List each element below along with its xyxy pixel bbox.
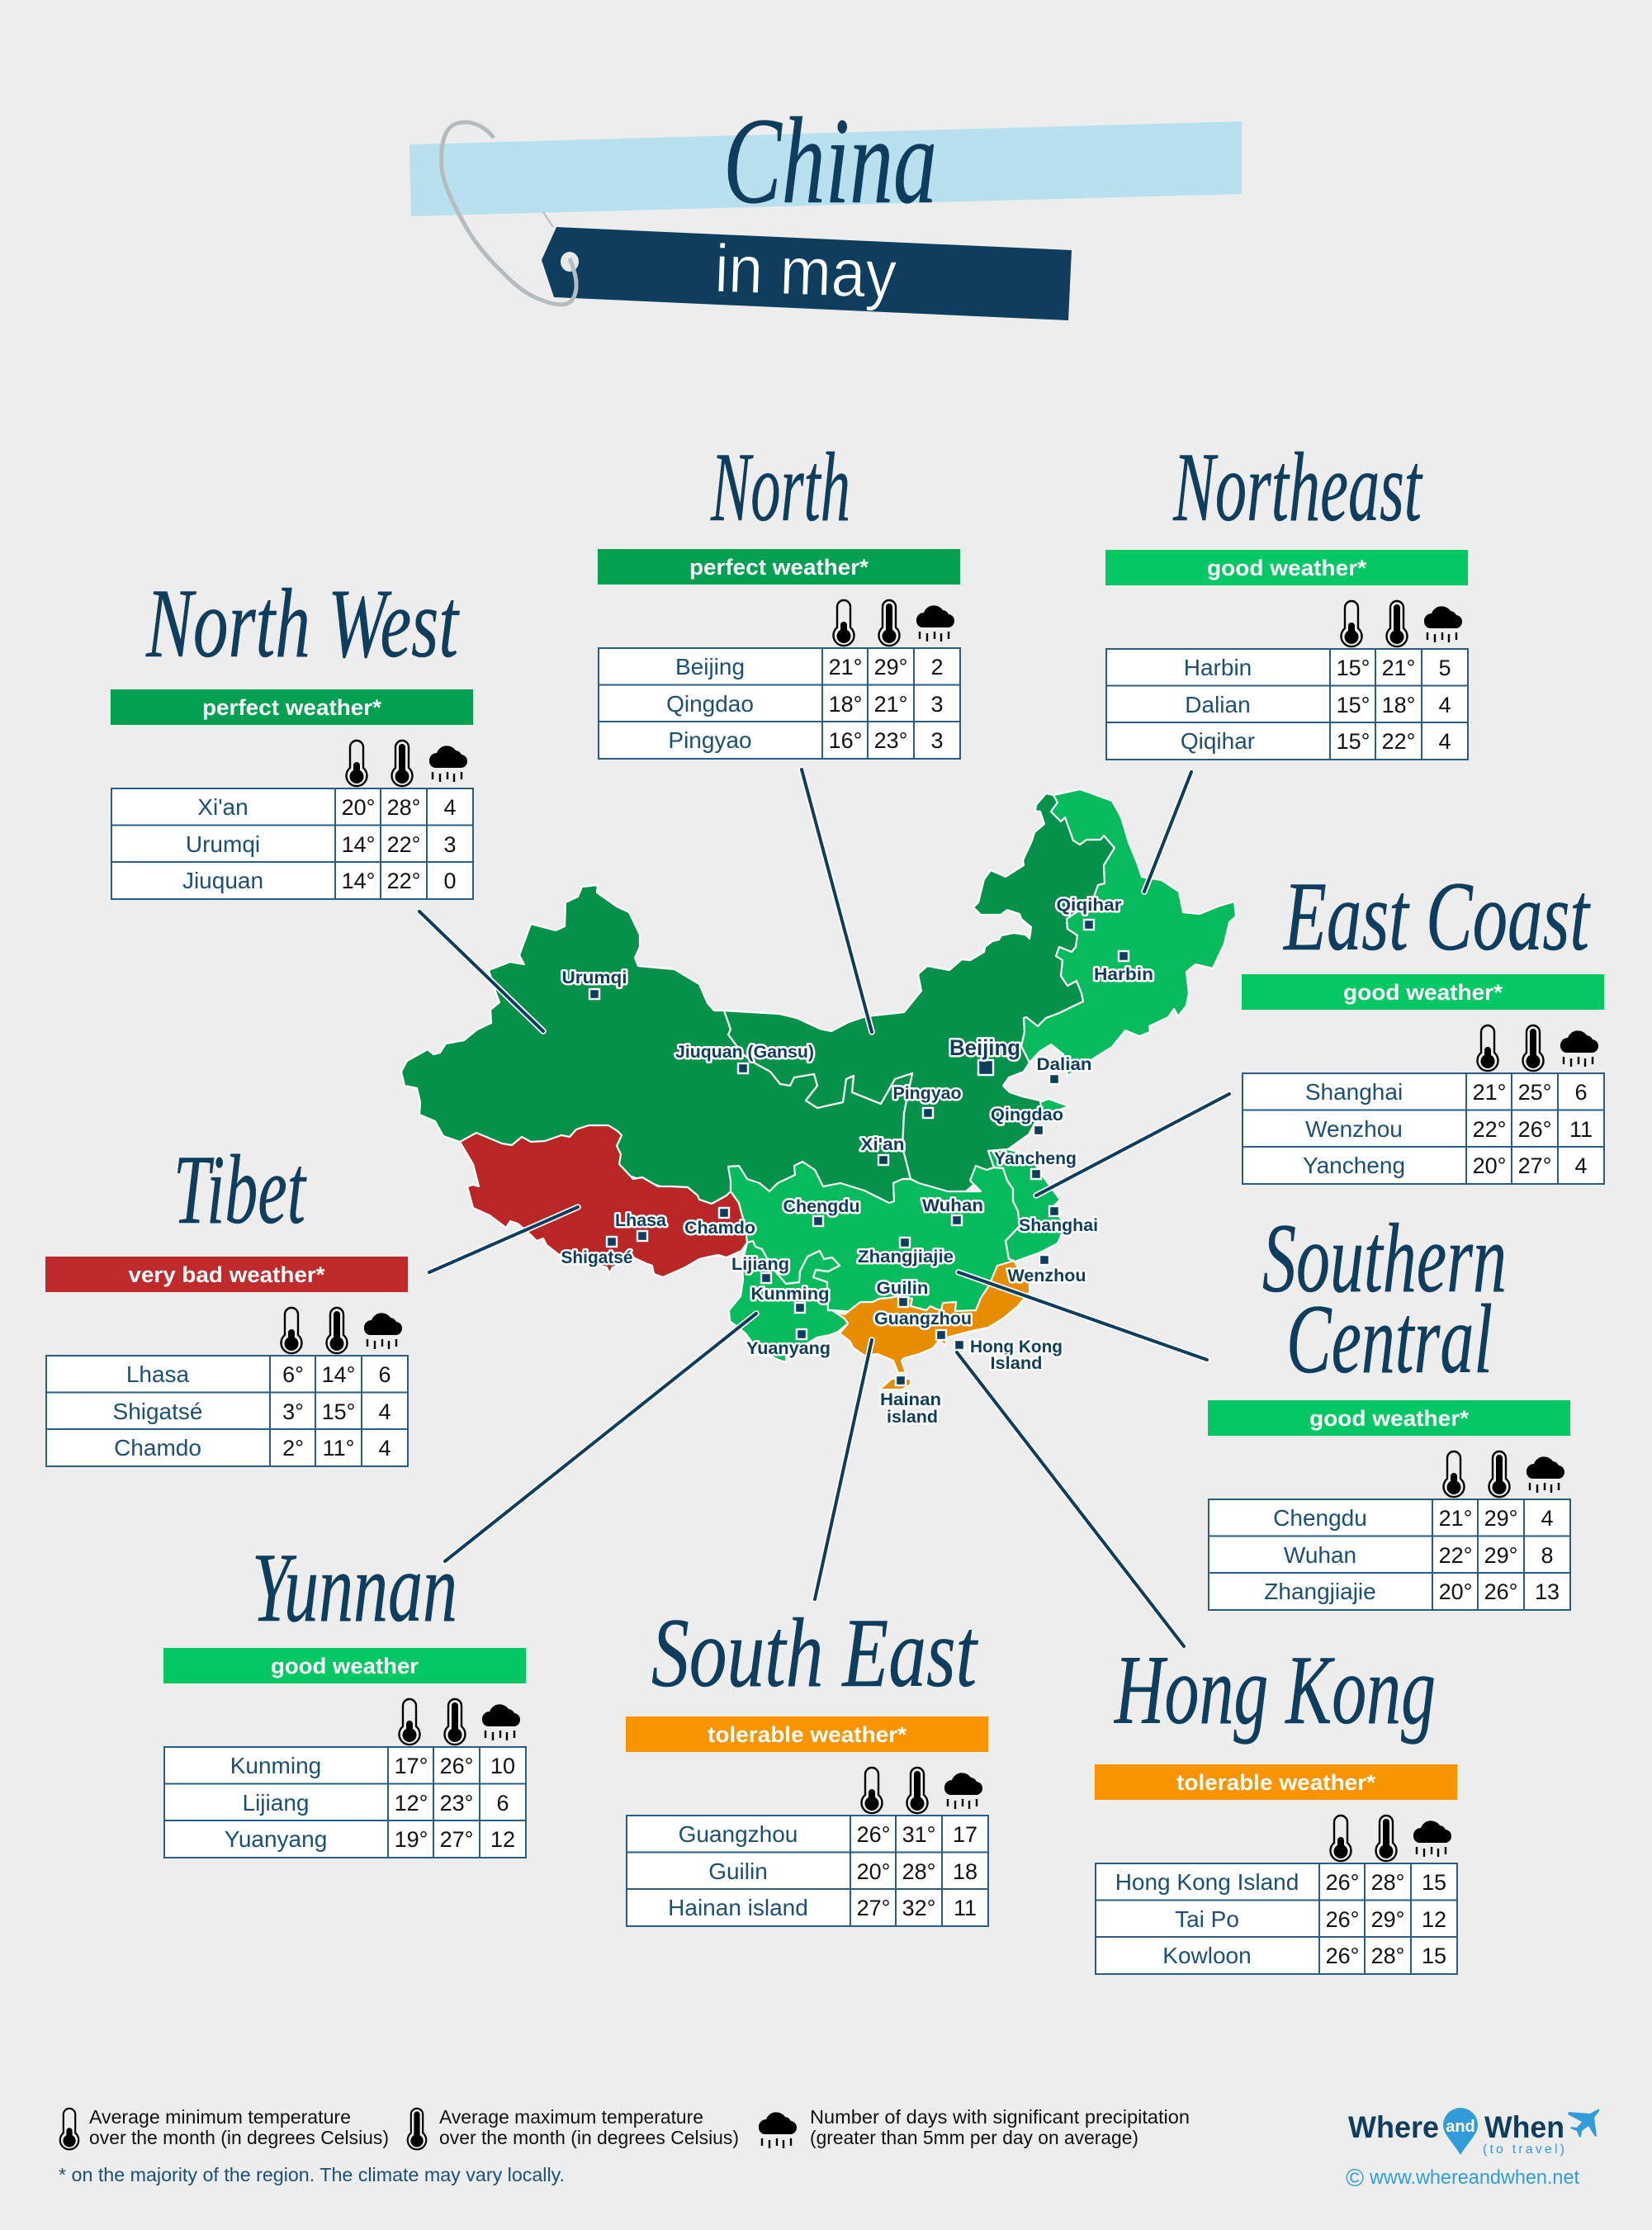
city labels: Guangzhou — [874, 1309, 972, 1328]
table: 26° — [1326, 1944, 1359, 1968]
table: Lhasa — [126, 1361, 190, 1387]
table: 29° — [1484, 1543, 1517, 1568]
table — [627, 1816, 988, 1926]
table: 21° — [829, 655, 862, 679]
logo word: Where: Where — [1348, 2110, 1439, 2144]
icons — [834, 600, 954, 646]
footnote: * on the majority of the region. The climate may vary locally. — [59, 2164, 565, 2185]
region: northeast — [1021, 789, 1236, 1076]
region: hainan island — [879, 1379, 911, 1390]
connector: yunnan — [445, 1314, 756, 1561]
table: 29° — [1371, 1907, 1404, 1932]
table: Chamdo — [114, 1435, 201, 1461]
city labels: Jiuquan (Gansu) — [675, 1043, 814, 1062]
banner: good weather* — [1207, 556, 1367, 580]
table: 4 — [1438, 693, 1451, 717]
panel: south east — [626, 1598, 988, 1926]
table: 2 — [930, 655, 944, 679]
weather table — [111, 689, 473, 899]
table: 22° — [387, 832, 420, 857]
table: 3 — [930, 692, 944, 717]
table: 15° — [322, 1399, 355, 1424]
banner: tolerable weather* — [708, 1722, 907, 1747]
table: Hainan island — [668, 1895, 808, 1920]
city labels: Harbin — [1094, 965, 1153, 984]
table: 0 — [443, 869, 457, 893]
table: 14° — [342, 832, 375, 857]
table: 11 — [1569, 1117, 1593, 1142]
table: 26° — [1484, 1579, 1517, 1604]
table: Tai Po — [1175, 1906, 1239, 1932]
heading: Northeast: Northeast — [1172, 432, 1423, 542]
banner — [598, 549, 960, 585]
table: Beijing — [675, 654, 745, 679]
heading: North West: North West — [145, 568, 460, 678]
table: 18° — [1382, 693, 1415, 717]
city labels: Lhasa — [615, 1211, 666, 1230]
city labels: Hong Kong — [970, 1338, 1063, 1356]
table: 28° — [1371, 1944, 1404, 1968]
table: 28° — [387, 795, 420, 820]
city labels: Lijiang — [731, 1255, 789, 1274]
table: 15 — [1422, 1944, 1446, 1968]
table — [164, 1747, 526, 1858]
banner — [1105, 550, 1468, 585]
table: Guilin — [708, 1858, 768, 1884]
legend text: precipitation: Number of days with significant precipitation — [810, 2106, 1190, 2128]
table: 20° — [857, 1859, 890, 1884]
panel: tibet — [45, 1134, 408, 1466]
city labels: Hainan — [880, 1390, 941, 1409]
city labels: Chengdu — [783, 1197, 860, 1216]
map regions — [401, 789, 1236, 1390]
table: 18° — [829, 692, 862, 717]
table: Chengdu — [1273, 1505, 1367, 1531]
icon: maximum temperature — [408, 2109, 426, 2149]
legend text: precipitation — [810, 2106, 1190, 2148]
heading: Southern: Southern — [1262, 1203, 1507, 1313]
table: 4 — [1574, 1153, 1588, 1178]
connector: northeast — [1144, 772, 1191, 892]
legend text: minimum temperature: over the month (in degrees Celsius) — [89, 2127, 389, 2148]
table: 4 — [1541, 1506, 1554, 1531]
table: 22° — [1473, 1117, 1506, 1142]
connector: east coast — [1036, 1094, 1229, 1195]
title block — [409, 92, 1242, 320]
legend text: maximum temperature: over the month (in degrees Celsius) — [439, 2127, 739, 2148]
table: 21° — [1382, 656, 1415, 680]
city labels: Xi'an — [860, 1135, 905, 1154]
table: 20° — [342, 795, 375, 820]
table: 3° — [282, 1399, 304, 1424]
website: www.whereandwhen.net — [1369, 2166, 1579, 2189]
luggage tag — [542, 227, 1072, 320]
table — [46, 1356, 408, 1466]
weather table — [626, 1716, 988, 1926]
table: 4 — [378, 1399, 391, 1424]
connector: south east — [815, 1340, 872, 1599]
heading: Hong Kong: Hong Kong — [1114, 1635, 1436, 1745]
table: 27° — [1518, 1153, 1551, 1178]
table: 21° — [1473, 1080, 1506, 1105]
heading: Yunnan: Yunnan — [252, 1532, 457, 1642]
table: 12° — [395, 1791, 428, 1816]
weather table — [1208, 1400, 1570, 1610]
city labels — [561, 896, 1153, 1427]
icon: precipitation — [759, 2112, 797, 2148]
table — [599, 648, 960, 759]
heading: North: North — [710, 432, 850, 542]
city labels: Island — [991, 1354, 1042, 1373]
tag hole — [561, 252, 579, 272]
banner: good weather* — [1343, 980, 1503, 1005]
table: 6 — [378, 1362, 391, 1387]
city labels: Wenzhou — [1007, 1267, 1086, 1285]
icons — [347, 741, 467, 786]
table — [111, 788, 473, 899]
city markers — [589, 920, 1129, 1385]
table: Kunming — [230, 1753, 321, 1778]
table: 31° — [902, 1822, 935, 1847]
city labels: island — [887, 1408, 938, 1427]
banner: tolerable weather* — [1176, 1770, 1376, 1795]
title: China: China — [723, 92, 937, 230]
table: 22° — [387, 869, 420, 893]
city labels: Chamdo — [684, 1219, 755, 1238]
panel: east coast — [1242, 861, 1604, 1184]
logo tagline: (to travel) — [1483, 2142, 1564, 2157]
icons — [400, 1699, 520, 1745]
table — [1243, 1073, 1604, 1184]
city labels: Qiqihar — [1057, 896, 1121, 915]
table: 29° — [1484, 1506, 1517, 1531]
table: 26° — [440, 1754, 473, 1778]
subtitle: in may: in may — [713, 231, 897, 313]
connector: hong kong — [957, 1352, 1184, 1646]
weather table — [1095, 1764, 1457, 1974]
banner: very bad weather* — [129, 1262, 325, 1287]
table: 10 — [490, 1754, 515, 1778]
table: 32° — [902, 1896, 935, 1920]
table: 21° — [1439, 1506, 1472, 1531]
table: 15° — [1337, 693, 1370, 717]
table: 26° — [1518, 1117, 1551, 1142]
connector: southern central — [959, 1272, 1207, 1360]
banner: good weather* — [1309, 1406, 1470, 1431]
table: 15 — [1422, 1870, 1446, 1895]
table: 4 — [378, 1436, 391, 1461]
icons — [1341, 601, 1462, 646]
banner: perfect weather* — [689, 555, 869, 580]
city labels: Pingyao — [893, 1084, 961, 1103]
table: 4 — [443, 795, 457, 820]
table: 3 — [443, 832, 457, 857]
city labels: Zhangjiajie — [858, 1248, 954, 1267]
table: Guangzhou — [679, 1821, 798, 1847]
icons — [862, 1768, 982, 1813]
region: shandong tip — [1040, 1099, 1069, 1111]
region: south east — [832, 1261, 1030, 1373]
table: 12 — [490, 1827, 515, 1852]
tag string — [543, 212, 553, 227]
weather table — [163, 1648, 526, 1858]
table: Harbin — [1184, 655, 1252, 680]
banner: good weather — [271, 1654, 419, 1678]
table: 8 — [1541, 1543, 1554, 1568]
title band — [409, 121, 1242, 216]
icons — [281, 1308, 402, 1353]
city labels: Yancheng — [994, 1149, 1077, 1168]
table: Pingyao — [668, 727, 752, 753]
table: Wuhan — [1284, 1542, 1356, 1568]
table: 21° — [874, 692, 907, 717]
map of China — [401, 789, 1236, 1427]
table: 27° — [857, 1896, 890, 1920]
legend text: minimum temperature — [89, 2106, 389, 2148]
city labels: Guilin — [877, 1279, 928, 1298]
panel: northeast — [1105, 432, 1468, 760]
city labels: Shigatsé — [561, 1248, 632, 1267]
table: 5 — [1438, 656, 1451, 680]
table: Shigatsé — [113, 1399, 202, 1424]
banner — [111, 689, 473, 725]
table: 6° — [282, 1362, 304, 1387]
connector: north — [802, 769, 872, 1032]
panel: southern central — [1208, 1203, 1570, 1610]
city labels: Shanghai — [1019, 1216, 1098, 1235]
banner — [626, 1716, 988, 1752]
banner — [1242, 974, 1604, 1010]
panel: hong kong — [1095, 1635, 1457, 1974]
table: 3 — [930, 728, 944, 753]
table: Yuanyang — [225, 1826, 327, 1852]
table: 11 — [954, 1896, 977, 1920]
table: 23° — [874, 728, 907, 753]
heading: Central: Central — [1286, 1284, 1493, 1394]
table: 6 — [496, 1791, 509, 1816]
table — [1209, 1499, 1570, 1610]
icon: minimum temperature — [60, 2109, 78, 2149]
table: Dalian — [1185, 692, 1251, 717]
connector: tibet — [429, 1207, 578, 1272]
table: 13 — [1535, 1579, 1560, 1604]
table: 2° — [282, 1436, 304, 1461]
banner: perfect weather* — [202, 695, 381, 720]
tag ring — [442, 122, 576, 305]
legend text: minimum temperature: Average minimum temperature — [89, 2106, 351, 2128]
weather table — [598, 549, 960, 759]
legend — [59, 2106, 1190, 2185]
table: Wenzhou — [1305, 1116, 1403, 1142]
table: Yancheng — [1303, 1153, 1405, 1178]
table: 20° — [1473, 1153, 1506, 1178]
table: 15° — [1337, 729, 1370, 754]
table: 17 — [953, 1822, 977, 1847]
city labels: Beijing — [949, 1035, 1020, 1060]
heading: South East: South East — [651, 1598, 978, 1707]
legend text: precipitation: (greater than 5mm per day on average) — [810, 2127, 1138, 2148]
table: 16° — [829, 728, 862, 753]
table: Urumqi — [186, 831, 260, 857]
table: 22° — [1382, 729, 1415, 754]
logo word: and: and — [1446, 2118, 1475, 2136]
city labels: Kunming — [751, 1285, 829, 1304]
region: north and north west — [401, 793, 1115, 1205]
table: 11° — [323, 1436, 354, 1461]
legend text: maximum temperature: Average maximum temperature — [439, 2106, 703, 2128]
connector: north west — [419, 911, 543, 1031]
table: Xi'an — [197, 794, 249, 820]
table: Hong Kong Island — [1115, 1869, 1299, 1895]
city labels: Qingdao — [991, 1106, 1063, 1124]
icons — [1478, 1025, 1598, 1071]
table: 26° — [857, 1822, 890, 1847]
table: Qingdao — [666, 691, 754, 717]
table: 25° — [1518, 1080, 1551, 1105]
weather table — [1242, 974, 1604, 1184]
logo: Where and When — [1346, 2108, 1599, 2192]
city labels: Wuhan — [922, 1196, 983, 1215]
table: 14° — [342, 869, 375, 893]
table: 27° — [440, 1827, 473, 1852]
table: Kowloon — [1162, 1943, 1252, 1968]
table: 22° — [1439, 1543, 1472, 1568]
region: tibet — [460, 1125, 747, 1277]
panel: north — [598, 432, 960, 759]
table — [1106, 649, 1468, 760]
table: 6 — [1574, 1080, 1588, 1105]
banner — [1095, 1764, 1457, 1800]
icons — [1443, 1451, 1564, 1497]
table: 12 — [1422, 1907, 1446, 1932]
table: 19° — [395, 1827, 428, 1852]
city labels: Yuanyang — [746, 1339, 831, 1358]
banner — [45, 1257, 408, 1292]
website: © — [1346, 2165, 1364, 2192]
panel: north west — [111, 568, 473, 899]
table: 20° — [1439, 1579, 1472, 1604]
city labels: Urumqi — [561, 968, 627, 987]
table: 26° — [1326, 1870, 1359, 1895]
table — [1096, 1863, 1457, 1974]
banner — [1208, 1400, 1570, 1436]
heading: Tibet: Tibet — [173, 1134, 307, 1244]
icons — [1331, 1816, 1451, 1861]
table: 23° — [440, 1791, 473, 1816]
icon: plane — [1568, 2109, 1599, 2138]
table: 14° — [322, 1362, 355, 1387]
logo pin — [1443, 2108, 1478, 2155]
table: 4 — [1438, 729, 1451, 754]
banner — [163, 1648, 526, 1683]
region: southern central, yunnan and east coast — [728, 1149, 1066, 1362]
panel: yunnan — [163, 1532, 526, 1858]
table: Shanghai — [1305, 1079, 1403, 1105]
table: Jiuquan — [182, 868, 263, 893]
weather table — [45, 1257, 408, 1466]
table: 18 — [953, 1859, 977, 1884]
table: 28° — [1371, 1870, 1404, 1895]
table: 29° — [874, 655, 907, 679]
table: Lijiang — [243, 1790, 309, 1816]
legend text: maximum temperature — [439, 2106, 739, 2148]
table: 17° — [395, 1754, 428, 1778]
weather table — [1105, 550, 1468, 760]
table: 15° — [1337, 656, 1370, 680]
internal borders — [724, 1011, 1020, 1310]
logo word: When: When — [1484, 2110, 1564, 2144]
table: 26° — [1326, 1907, 1359, 1932]
table: 28° — [902, 1859, 935, 1884]
table: Qiqihar — [1181, 728, 1255, 754]
city labels: Dalian — [1037, 1055, 1091, 1074]
table: Zhangjiajie — [1264, 1579, 1376, 1604]
